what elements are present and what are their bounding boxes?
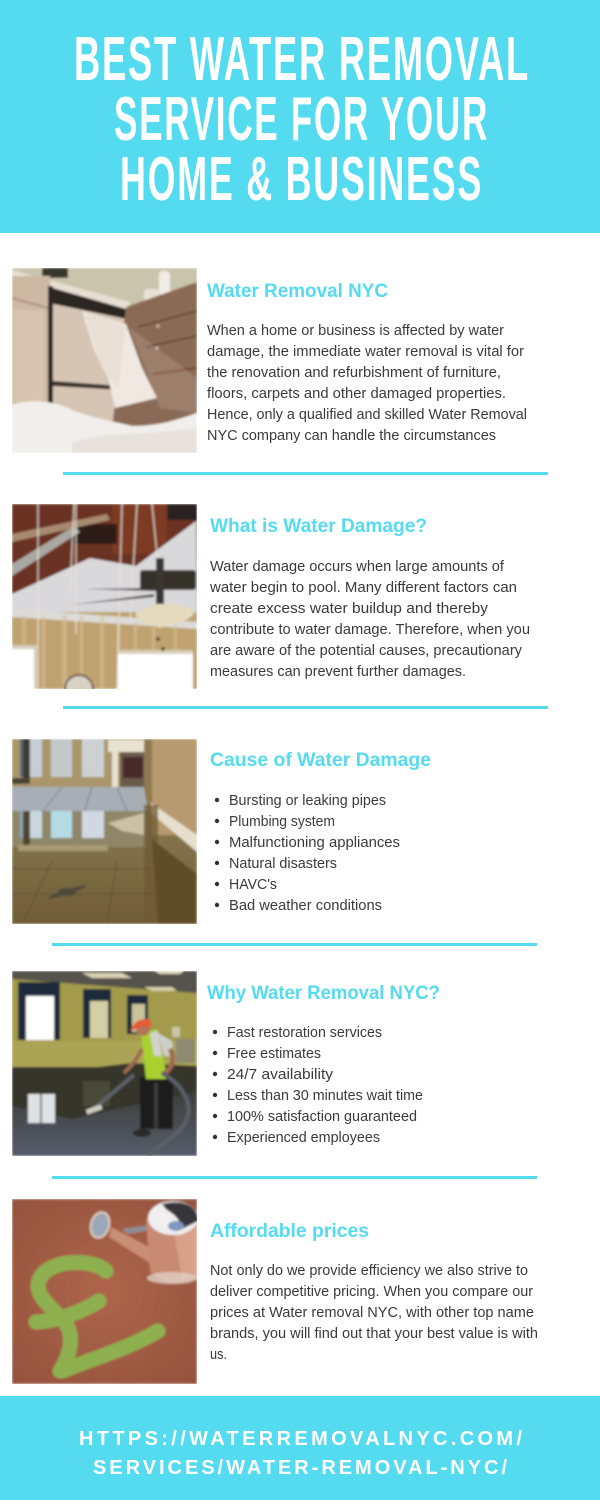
bullet list: 100% satisfaction guaranteed: [227, 1108, 417, 1125]
body text: When a home or business is affected by water: [207, 322, 504, 339]
body text: [207, 322, 527, 444]
heading: Why Water Removal NYC?: [207, 983, 440, 1004]
bullet list: Free estimates: [227, 1045, 321, 1062]
body text: Water damage occurs when large amounts of: [210, 558, 505, 575]
body text: the renovation and refurbishment of furniture,: [207, 364, 501, 381]
title: [74, 25, 530, 214]
heading: Cause of Water Damage: [210, 750, 431, 771]
body text: are aware of the potential causes, precautionary: [210, 642, 522, 659]
bullet list: [213, 1024, 423, 1146]
body text: contribute to water damage. Therefore, when you: [210, 621, 530, 638]
panel: why water removal NYC: [12, 971, 440, 1156]
footer banner: [0, 1396, 600, 1500]
body text: NYC company can handle the circumstances: [207, 427, 496, 444]
bullet list: [215, 792, 400, 914]
body text: [209, 558, 530, 680]
body text: measures can prevent further damages.: [210, 663, 466, 680]
bullet list: Plumbing system: [229, 813, 335, 830]
bullet list: Less than 30 minutes wait time: [227, 1087, 423, 1104]
bullet list: Natural disasters: [229, 855, 337, 872]
body text: water begin to pool. Many different factors can: [209, 579, 517, 596]
heading: Affordable prices: [210, 1221, 369, 1242]
body text: brands, you will find out that your best value is with: [210, 1325, 538, 1342]
panel: what is water damage: [12, 504, 530, 703]
body text: deliver competitive pricing. When you compare our: [210, 1283, 533, 1300]
bullet list: Bad weather conditions: [229, 897, 382, 914]
panel: water removal NYC: [12, 268, 527, 453]
photo: flooded tiled room: [12, 739, 197, 924]
body text: prices at Water removal NYC, with other top name: [210, 1304, 534, 1321]
photo: water bursting from dishwasher: [12, 268, 197, 453]
bullet list: Bursting or leaking pipes: [229, 792, 386, 809]
photo: water leaking through ceiling: [12, 504, 197, 703]
website URL: HTTPS://WATERREMOVALNYC.COM/: [79, 1428, 522, 1450]
photo: worker extracting water from carpet: [12, 971, 197, 1156]
website URL: [79, 1428, 522, 1479]
bullet list: 24/7 availability: [227, 1066, 334, 1083]
panel: cause of water damage: [12, 739, 431, 924]
body text: Not only do we provide efficiency we also strive to: [210, 1262, 528, 1279]
header banner: [0, 0, 600, 233]
body text: [210, 1262, 538, 1363]
bullet list: Malfunctioning appliances: [229, 834, 400, 851]
body text: us.: [210, 1346, 227, 1363]
heading: Water Removal NYC: [207, 281, 388, 302]
body text: floors, carpets and other damaged properties.: [207, 385, 506, 402]
body text: create excess water buildup and thereby: [210, 600, 489, 617]
bullet list: HAVC's: [229, 876, 277, 893]
heading: What is Water Damage?: [210, 516, 427, 537]
body text: Hence, only a qualified and skilled Water Removal: [207, 406, 527, 423]
website URL: SERVICES/WATER-REMOVAL-NYC/: [93, 1457, 507, 1479]
panel: affordable prices: [12, 1199, 538, 1384]
bullet list: Experienced employees: [227, 1129, 380, 1146]
bullet list: Fast restoration services: [227, 1024, 382, 1041]
body text: damage, the immediate water removal is vital for: [207, 343, 524, 360]
photo: watering can and grass pound sign: [12, 1199, 198, 1384]
